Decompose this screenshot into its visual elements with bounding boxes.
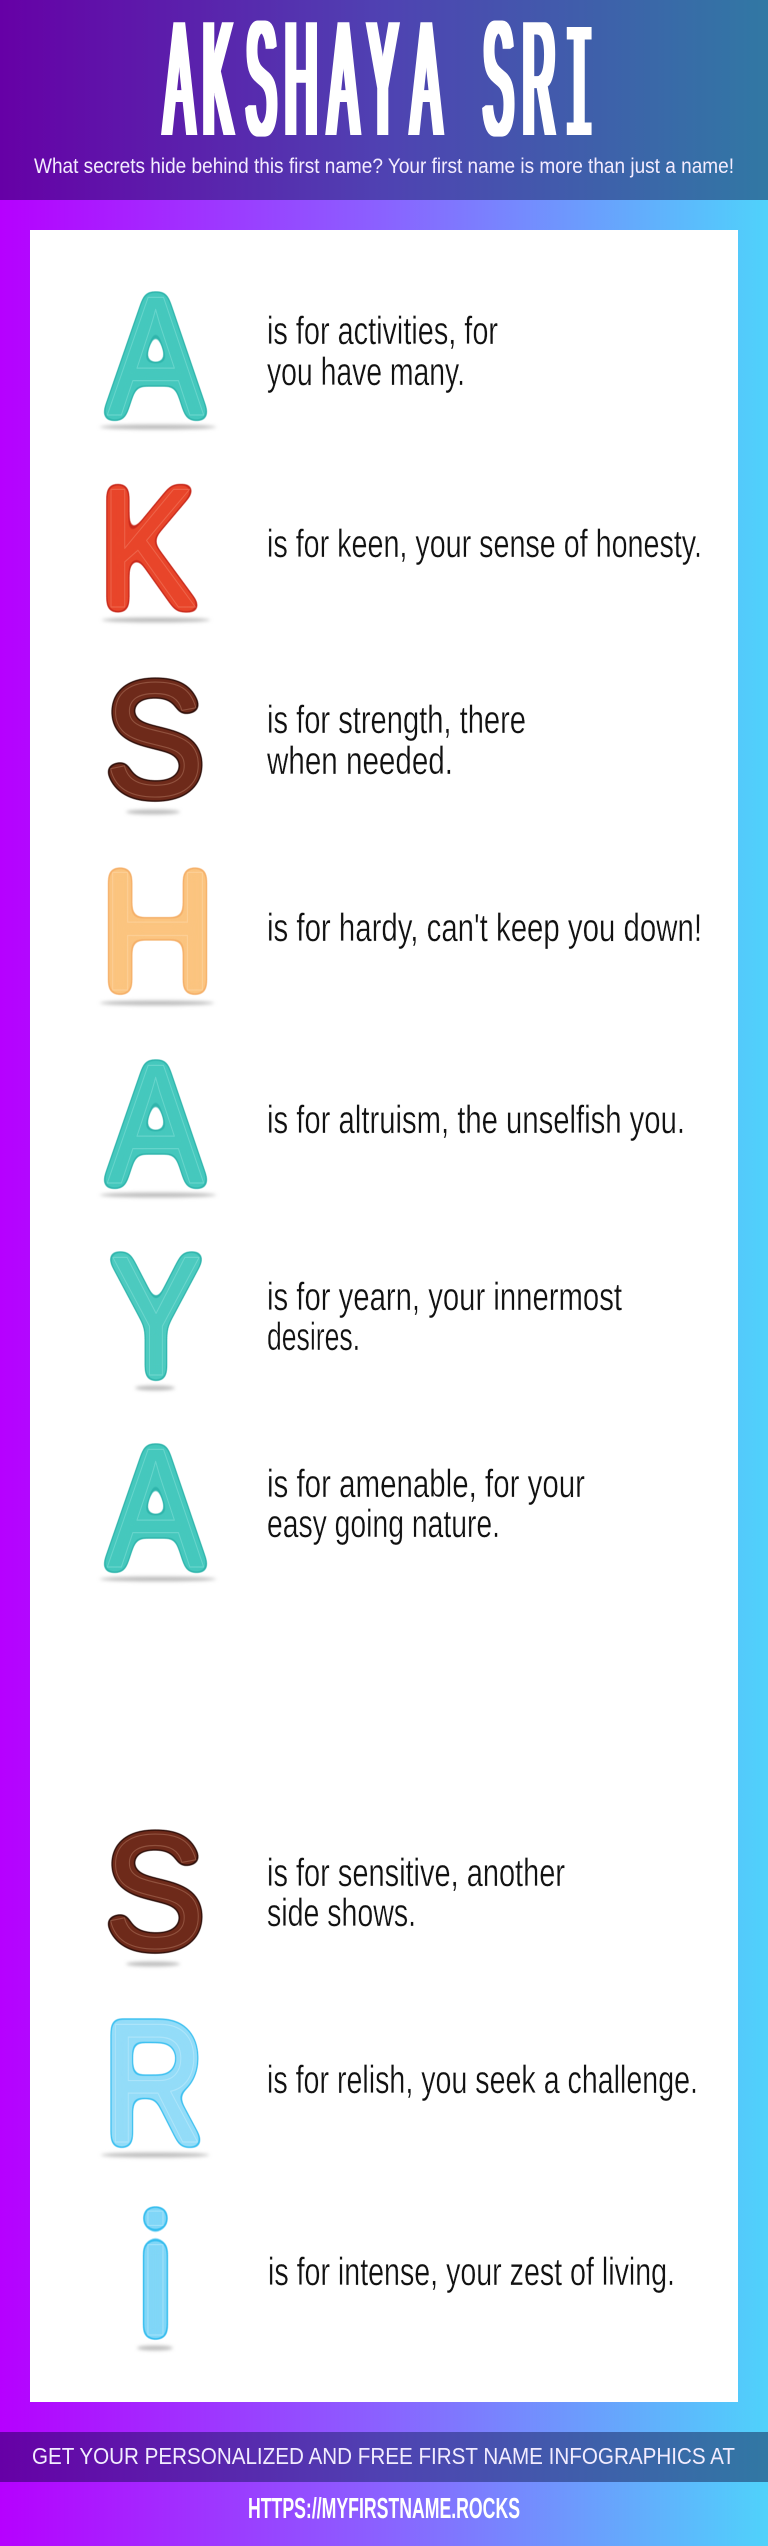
- row: A activities: [100, 260, 498, 452]
- text: yearn: is for yearn, your innermost: [267, 1276, 622, 1319]
- icon: teal letter A: A: [107, 1412, 204, 1604]
- icon: blue letter R: R: [104, 1987, 204, 2178]
- text: strength: when needed.: [266, 740, 453, 783]
- icon: orange letter H: H: [99, 836, 216, 1027]
- text: amenable: [267, 1463, 585, 1546]
- icon: blue letter i: i: [136, 2181, 174, 2372]
- icon: brown letter S: S: [104, 1802, 205, 1983]
- text: sensitive: [267, 1852, 565, 1935]
- row: K keen: [99, 453, 702, 643]
- text: activities: you have many.: [267, 351, 465, 394]
- text: activities: [267, 310, 498, 394]
- icon: blue letter i: i: [136, 2181, 174, 2372]
- icon: brown letter S: S: [104, 1802, 205, 1983]
- text: amenable: is for amenable, for your: [267, 1463, 585, 1506]
- text: sensitive: is for sensitive, another: [267, 1852, 565, 1895]
- text: strength: is for strength, there: [267, 699, 526, 742]
- row: A altruism: [100, 1028, 685, 1220]
- icon: teal letter Y: Y: [110, 1220, 202, 1411]
- icon: orange letter H: H: [99, 836, 216, 1027]
- white content panel: [30, 230, 738, 2402]
- text: yearn: desires.: [267, 1316, 360, 1359]
- icon: blue letter R: R: [104, 1987, 204, 2178]
- icon: orange letter H: H: [99, 836, 216, 1027]
- icon: teal letter A: A: [107, 1028, 204, 1220]
- text: yearn: [267, 1276, 622, 1359]
- icon: teal letter Y: Y: [110, 1220, 202, 1411]
- text: sensitive: side shows.: [267, 1892, 416, 1935]
- row: i intense: [136, 2181, 675, 2372]
- text: strength: [266, 699, 526, 783]
- text: amenable: easy going nature.: [267, 1503, 500, 1546]
- footer url: HTTPS://MYFIRSTNAME.ROCKS: [248, 2493, 520, 2525]
- icon: brown letter S: S: [104, 650, 205, 831]
- icon: teal letter Y: Y: [110, 1220, 202, 1411]
- icon: blue letter R: R: [104, 1987, 204, 2178]
- header band: [0, 0, 768, 200]
- icon: teal letter A: A: [107, 260, 204, 452]
- icon: teal letter A: A: [107, 1412, 204, 1604]
- icon: red letter K: K: [99, 453, 197, 643]
- icon: red letter K: K: [99, 453, 197, 643]
- row: S strength: [104, 650, 526, 831]
- icon: brown letter S: S: [104, 1802, 205, 1983]
- icon: teal letter A: A: [107, 1028, 204, 1220]
- text: activities: is for activities, for: [267, 310, 498, 353]
- footer band: [0, 2432, 768, 2482]
- row: R relish: [101, 1987, 698, 2178]
- row: Y yearn: [110, 1220, 622, 1411]
- title: I: [566, 0, 592, 186]
- icon: teal letter A: A: [107, 260, 204, 452]
- row: H hardy: [99, 836, 702, 1027]
- icon: teal letter A: A: [107, 260, 204, 452]
- icon: brown letter S: S: [104, 650, 205, 831]
- icon: red letter K: K: [99, 453, 197, 643]
- icon: teal letter A: A: [107, 1028, 204, 1220]
- icon: brown letter S: S: [104, 650, 205, 831]
- icon: teal letter A: A: [107, 1412, 204, 1604]
- icon: blue letter i: i: [136, 2181, 174, 2372]
- row: S sensitive: [104, 1802, 565, 1983]
- row: A amenable: [100, 1412, 585, 1604]
